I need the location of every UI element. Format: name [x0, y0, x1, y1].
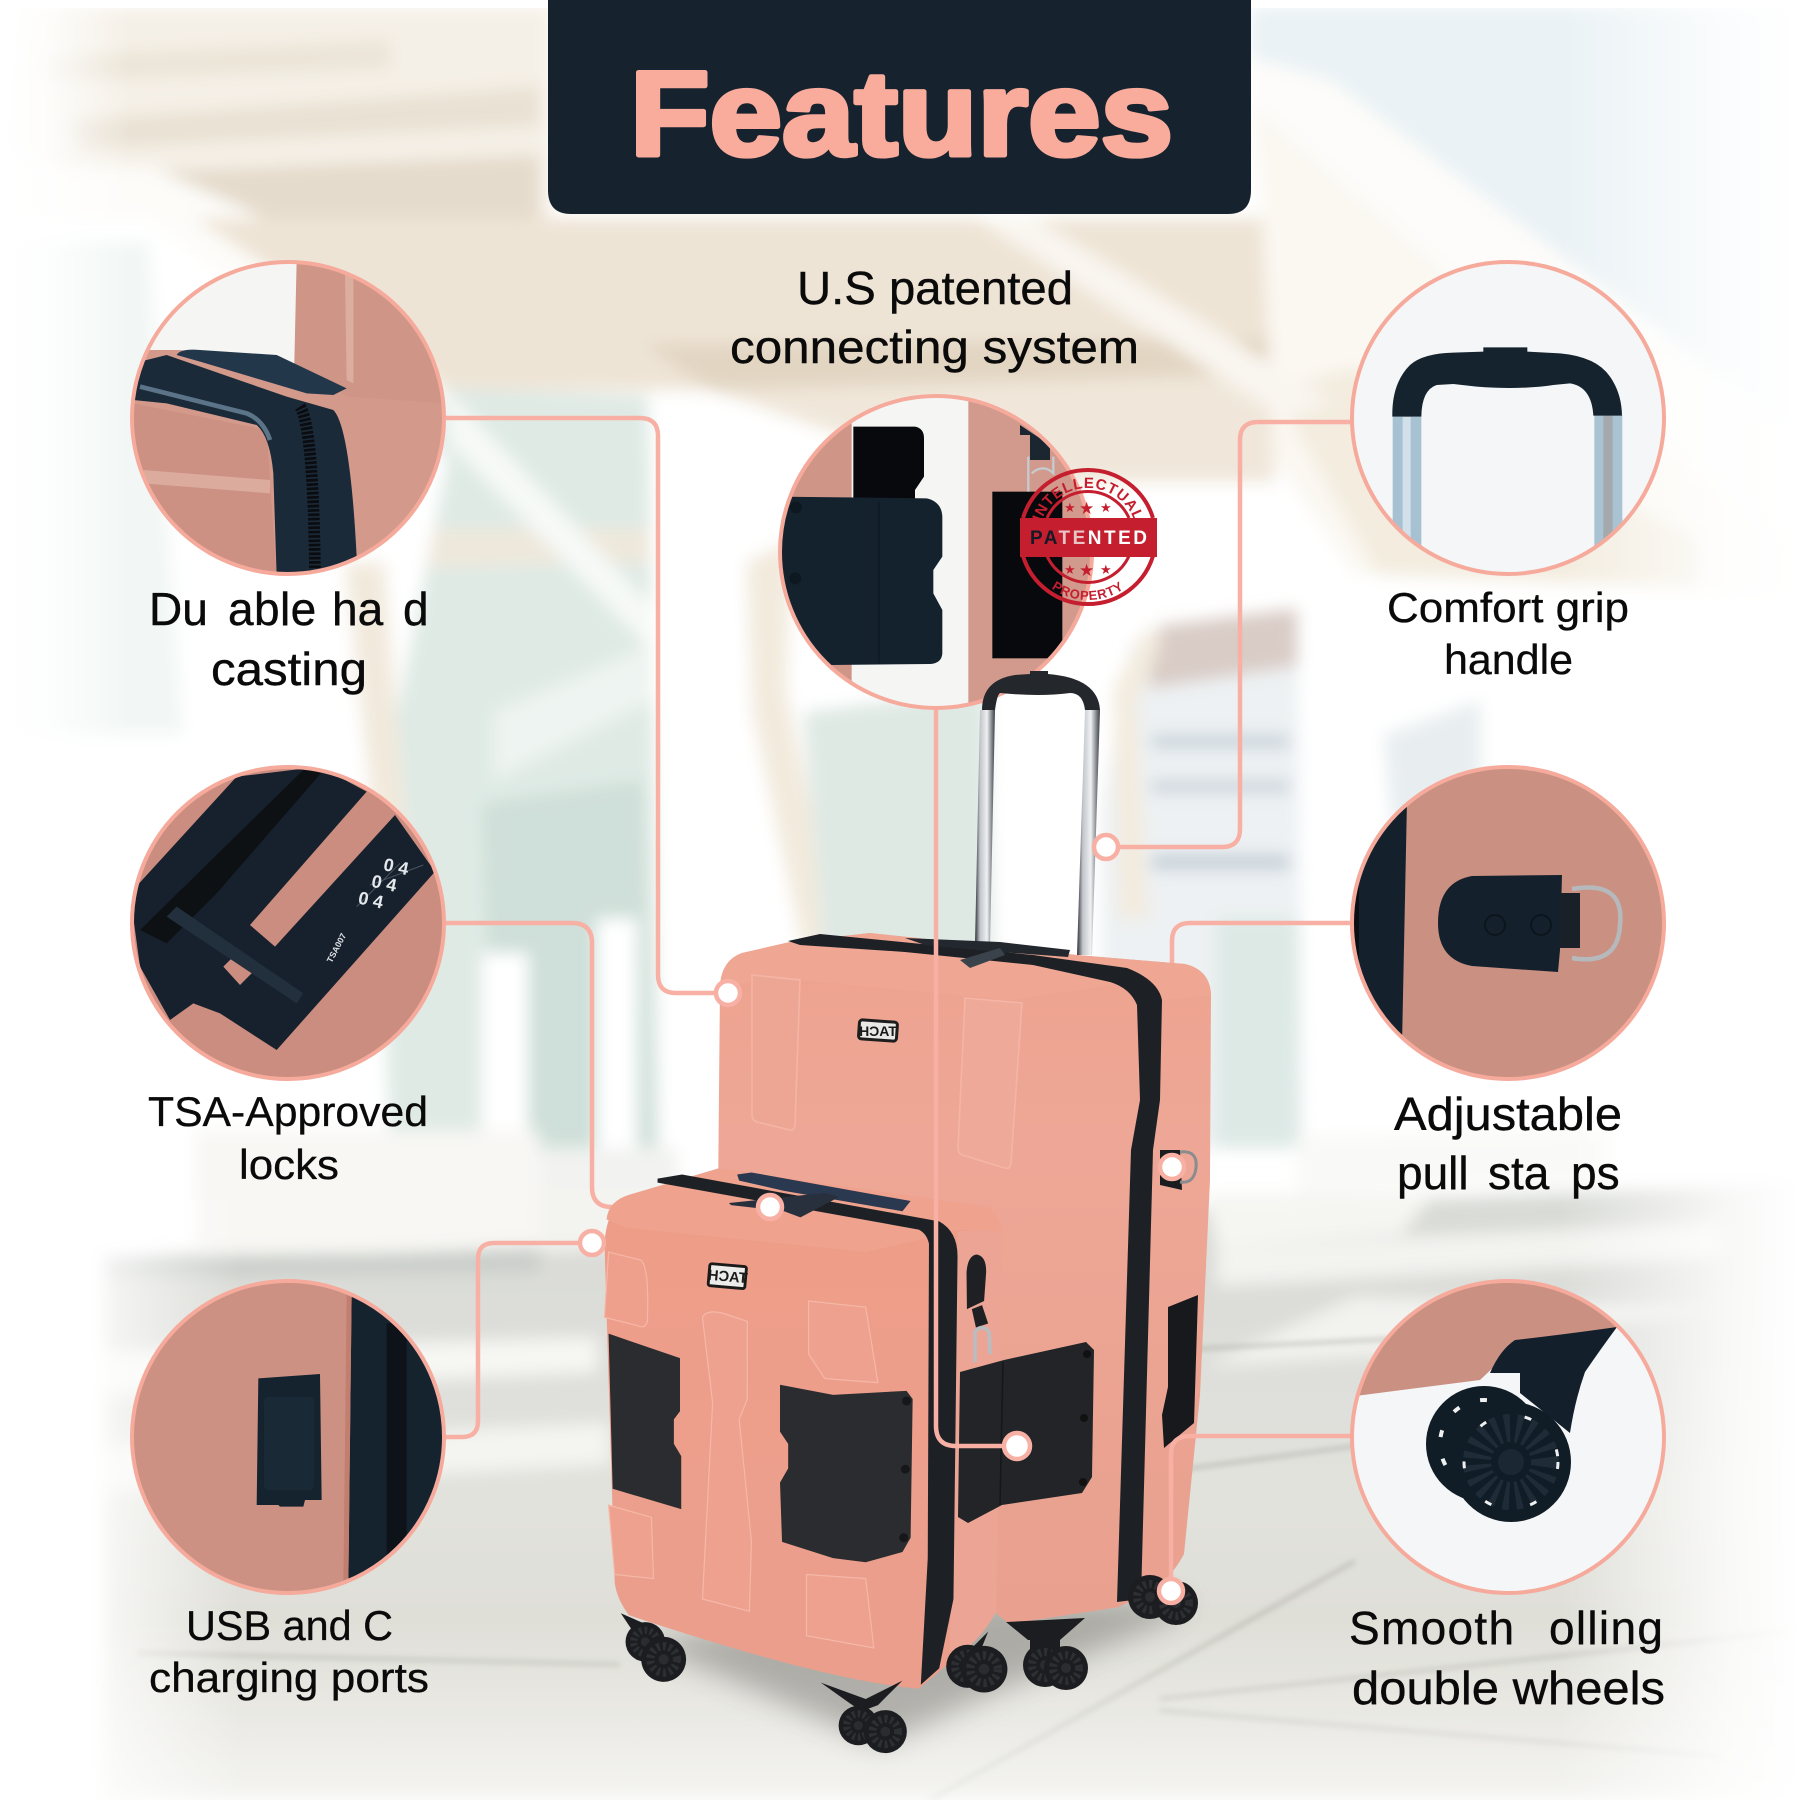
- patented stamp: ★: [1100, 500, 1112, 515]
- label: TSA-approved locks: locks: [239, 1141, 339, 1188]
- suitcase pair: [604, 710, 1211, 1753]
- patented stamp: ★: [1079, 561, 1094, 580]
- patented stamp: [1020, 468, 1157, 606]
- label: US patented connecting system: connecting system: [730, 321, 1139, 373]
- zipper band: [788, 934, 1162, 1602]
- label: USB and C charging ports: [149, 1602, 429, 1701]
- inset: TSA-approved locks: 0 4: [382, 854, 410, 879]
- right dark panel: [780, 1385, 913, 1562]
- brand badge: TACH: [859, 1023, 897, 1039]
- inset: USB and C charging ports: [131, 1280, 453, 1594]
- inset: TSA-approved locks: 0 4: [370, 871, 398, 896]
- floor shadow: [640, 1600, 1190, 1745]
- patented stamp: ★: [1100, 562, 1112, 577]
- title banner: [548, 0, 1251, 214]
- connector lines: [445, 418, 1352, 1437]
- inset: comfort grip handle: [1351, 261, 1665, 575]
- label: durable hard casting: casting: [211, 643, 367, 695]
- patented stamp: ★: [1079, 499, 1094, 518]
- label: adjustable pull straps: Adjustable: [1394, 1088, 1622, 1140]
- pull strap on side: [1160, 1150, 1182, 1190]
- patented stamp: PROPERTY: [1052, 581, 1121, 600]
- label: adjustable pull straps: ps: [1571, 1147, 1620, 1199]
- inset: durable hard casting: [130, 260, 447, 577]
- label: USB and C charging ports: USB and C: [186, 1602, 393, 1649]
- side panel dark: [1162, 1295, 1198, 1448]
- label: adjustable pull straps: pull: [1397, 1147, 1469, 1199]
- handle strap: [737, 1172, 911, 1211]
- label: TSA-approved locks: [148, 1088, 428, 1188]
- lock tag and shackle: [967, 1254, 986, 1309]
- label: adjustable pull straps: [1394, 1088, 1622, 1199]
- inset: TSA-approved locks: [130, 766, 445, 1080]
- patented stamp: PATENTED: [1030, 528, 1147, 549]
- label: durable hard casting: Du: [149, 583, 208, 635]
- left dark panel: [609, 1334, 681, 1509]
- inset: TSA-approved locks: 0 4: [356, 888, 385, 912]
- label: smooth rolling double wheels: Smooth: [1349, 1602, 1515, 1654]
- label: comfort grip handle: Comfort grip: [1387, 584, 1629, 631]
- label: comfort grip handle: [1387, 584, 1629, 683]
- patented stamp: ★: [1064, 562, 1076, 577]
- large suitcase telescopic handle tubes: [975, 710, 1100, 955]
- inset: smooth rolling double wheels: [1340, 1270, 1680, 1594]
- connector line: centre drop: [936, 708, 1017, 1446]
- label: durable hard casting: able: [228, 583, 317, 635]
- zipper band: [658, 1174, 958, 1685]
- label: US patented connecting system: U.S patented: [797, 262, 1073, 314]
- label: durable hard casting: d: [403, 583, 429, 635]
- patented stamp: ★: [1064, 500, 1076, 515]
- connector line: wheels: [1171, 1436, 1352, 1591]
- label: comfort grip handle: handle: [1444, 636, 1573, 683]
- label: durable hard casting: [149, 583, 429, 695]
- label: US patented connecting system: [730, 262, 1139, 373]
- brand badge: TACH: [707, 1268, 748, 1287]
- inset: adjustable pull straps: [1345, 766, 1665, 1080]
- label: smooth rolling double wheels: double wheels: [1352, 1662, 1665, 1714]
- large suitcase handle grip: [982, 671, 1100, 710]
- label: smooth rolling double wheels: [1349, 1602, 1665, 1714]
- large suitcase wheels: [1006, 1575, 1198, 1690]
- label: durable hard casting: ha: [332, 583, 384, 635]
- label: USB and C charging ports: charging ports: [149, 1654, 429, 1701]
- title text: Features: [630, 47, 1173, 181]
- connector flap between cases: [958, 1342, 1094, 1523]
- label: TSA-approved locks: TSA-Approved: [148, 1088, 428, 1135]
- top strap: [905, 938, 1070, 957]
- label: adjustable pull straps: sta: [1488, 1147, 1550, 1199]
- label: smooth rolling double wheels: olling: [1549, 1602, 1664, 1654]
- connector dots: [580, 835, 1184, 1603]
- small suitcase body: [604, 1168, 1007, 1753]
- large suitcase body: [718, 933, 1211, 1624]
- small suitcase wheels: [621, 1613, 1007, 1753]
- inset: connecting system: [773, 390, 1102, 713]
- inset: TSA-approved locks: TSA007: [325, 931, 348, 964]
- patented stamp: INTELLECTUAL: [1032, 478, 1142, 518]
